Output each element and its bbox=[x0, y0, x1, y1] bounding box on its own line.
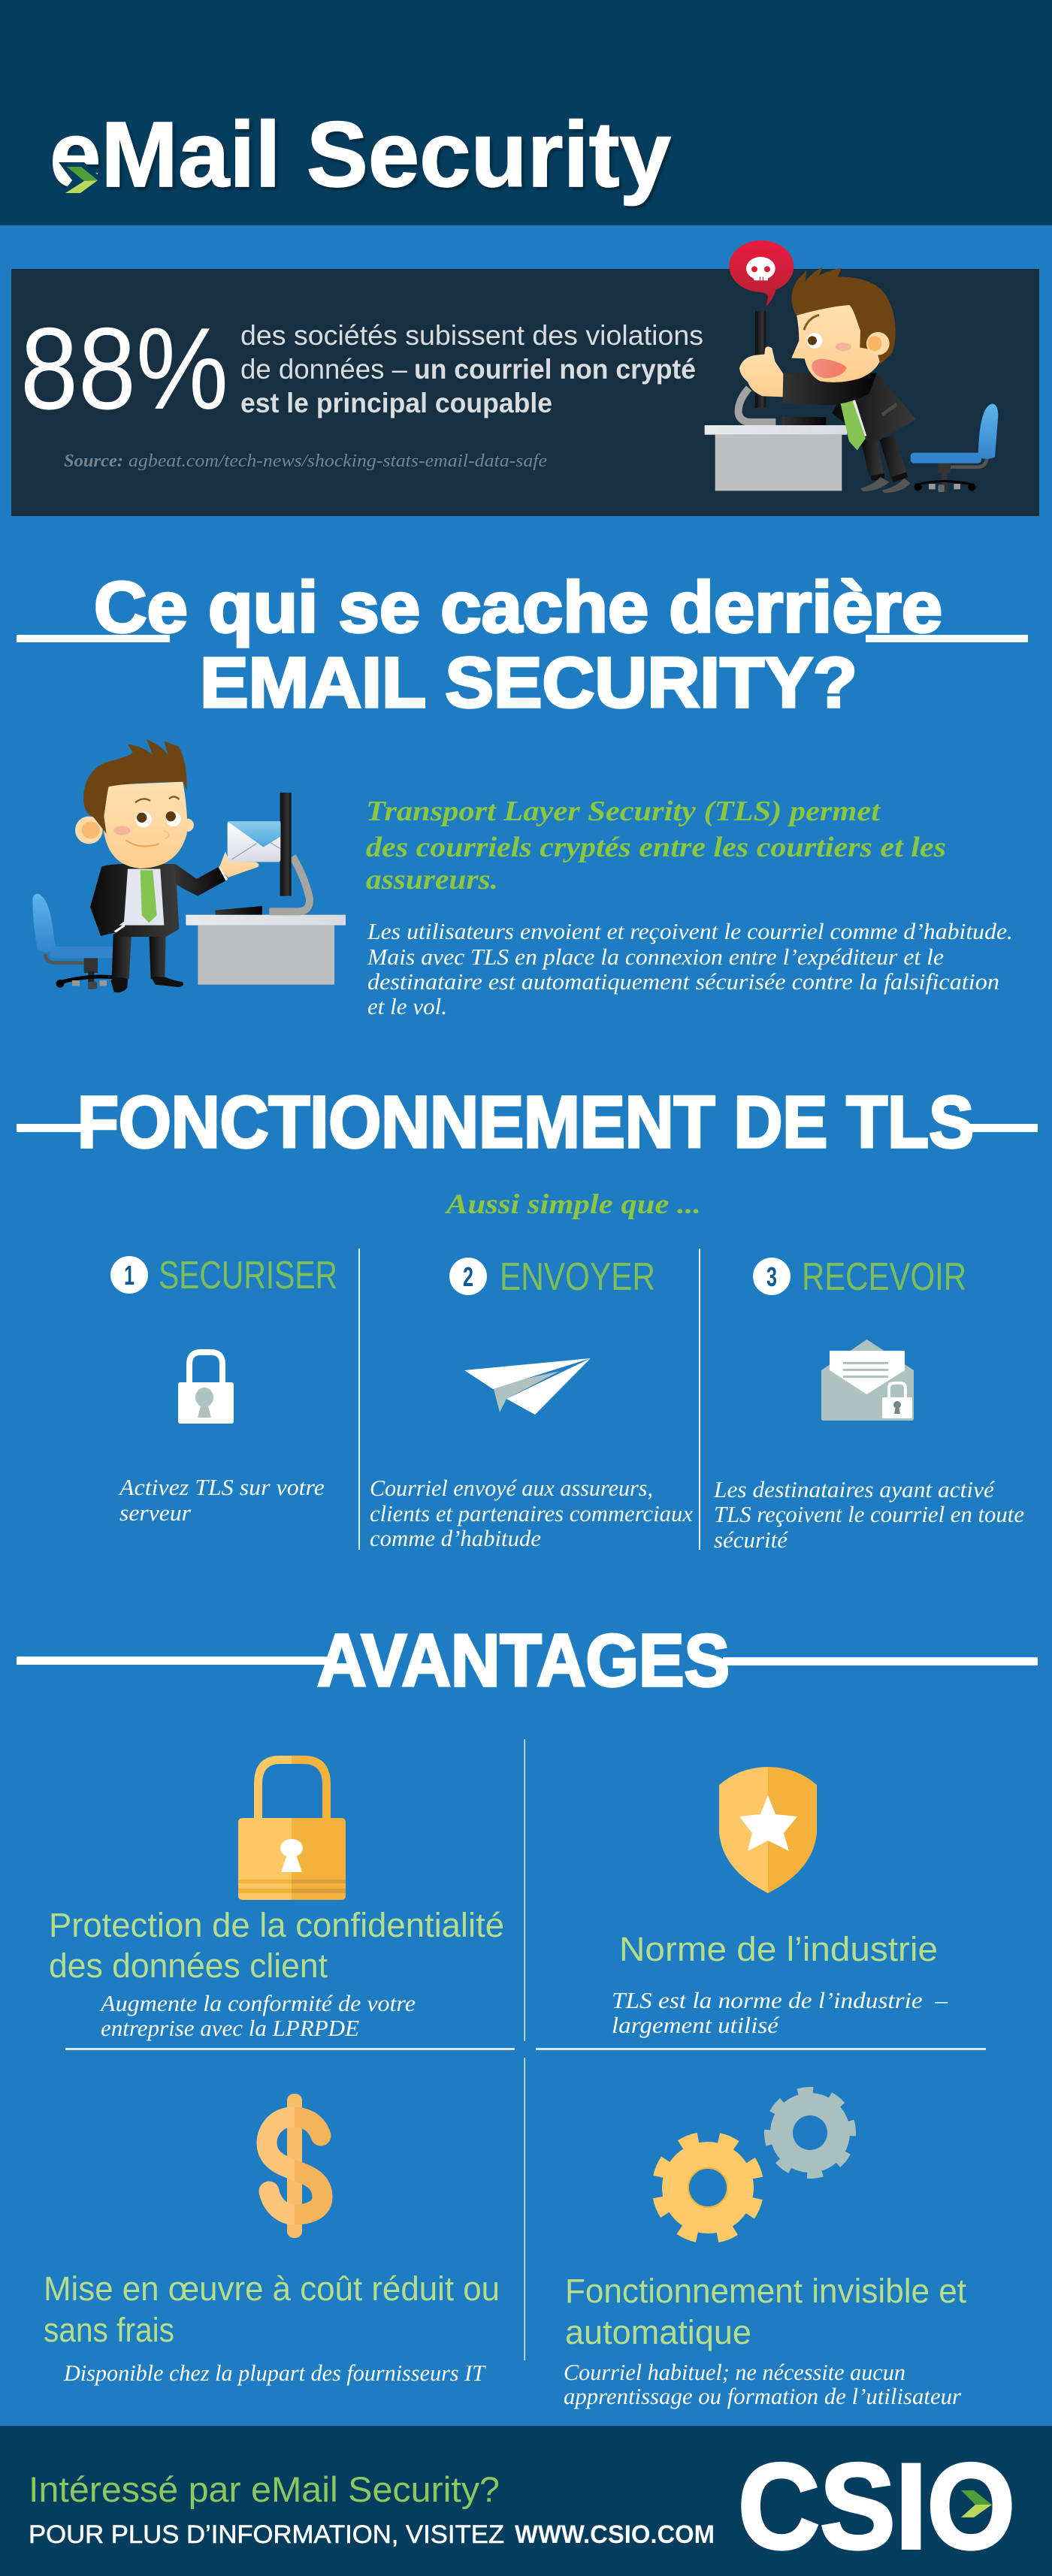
monitor bbox=[739, 311, 826, 425]
statistic text: est le principal coupable bbox=[240, 388, 552, 418]
CSIO logo: CSIO bbox=[738, 2439, 1015, 2574]
step description bbox=[713, 1476, 1024, 1553]
advantage title: Norme de l’industrie bbox=[619, 1930, 938, 1968]
advantage description: Disponible chez la plupart des fournisseurs IT bbox=[63, 2360, 487, 2386]
step 3: receive bbox=[713, 1255, 1024, 1553]
description: destinataire est automatiquement sécurisée contre la falsification bbox=[367, 968, 999, 995]
heading: advantages bbox=[17, 1619, 1038, 1702]
big number: 88% bbox=[20, 304, 228, 433]
step number bbox=[753, 1258, 791, 1295]
icon: title chevron bbox=[59, 162, 104, 198]
green lead: assureurs. bbox=[366, 864, 498, 895]
advantage title: Mise en œuvre à coût réduit ou bbox=[44, 2269, 500, 2308]
step title: ENVOYER bbox=[500, 1255, 655, 1299]
step number: 3 bbox=[766, 1261, 777, 1292]
step description: Courriel envoyé aux assureurs, bbox=[370, 1475, 653, 1501]
footer bbox=[0, 2426, 1052, 2576]
intro text bbox=[366, 796, 1013, 1019]
footer link text bbox=[29, 2520, 715, 2549]
advantage title bbox=[49, 1906, 504, 1985]
icon: paper plane bbox=[464, 1358, 591, 1415]
statistic text: des sociétés subissent des violations bbox=[240, 320, 703, 351]
advantage title bbox=[44, 2269, 500, 2349]
envelope bbox=[228, 821, 280, 862]
step description: TLS reçoivent le courriel en toute bbox=[714, 1501, 1024, 1527]
advantage description: entreprise avec la LPRPDE bbox=[101, 2015, 359, 2041]
description: Mais avec TLS en place la connexion entre l’expéditeur et le bbox=[367, 944, 944, 970]
chair bbox=[32, 894, 116, 989]
panel: 88% statistic bbox=[11, 269, 1039, 516]
advantage description: Augmente la conformité de votre bbox=[99, 1990, 416, 2016]
advantage title: Fonctionnement invisible et bbox=[565, 2272, 966, 2310]
advantage description: apprentissage ou formation de l’utilisateur bbox=[564, 2383, 962, 2409]
monitor bbox=[216, 793, 310, 915]
icon: gold padlock bbox=[238, 1756, 346, 1900]
description: Les utilisateurs envoient et reçoivent le courriel comme d’habitude. bbox=[367, 918, 1013, 944]
advantage description: largement utilisé bbox=[612, 2012, 779, 2038]
man head bbox=[791, 267, 896, 382]
footer call to action: Intéressé par eMail Security? bbox=[29, 2469, 500, 2509]
step title: SECURISER bbox=[159, 1254, 337, 1297]
step description: Les destinataires ayant activé bbox=[713, 1476, 995, 1502]
advantage description: TLS est la norme de l’industrie – bbox=[612, 1987, 948, 2013]
advantage description bbox=[612, 1987, 948, 2038]
heading: advantages: AVANTAGES bbox=[317, 1619, 730, 1702]
desk bbox=[705, 425, 847, 491]
advantage: low cost bbox=[44, 2094, 500, 2386]
step number bbox=[449, 1258, 487, 1295]
advantage title: sans frais bbox=[44, 2311, 174, 2349]
source: agbeat.com/tech-news/shocking-stats-email-data-safe bbox=[128, 451, 547, 471]
step number bbox=[110, 1256, 148, 1294]
step number: 1 bbox=[124, 1260, 135, 1291]
icon: padlock bbox=[178, 1352, 234, 1424]
title: eMail Security bbox=[50, 104, 671, 207]
green lead: Transport Layer Security (TLS) permet bbox=[366, 796, 881, 827]
step description bbox=[370, 1475, 693, 1551]
advantage: data protection bbox=[49, 1756, 504, 2041]
advantage description: Courriel habituel; ne nécessite aucun bbox=[564, 2359, 905, 2385]
advantage title bbox=[565, 2272, 966, 2351]
description: et le vol. bbox=[367, 993, 447, 1019]
description bbox=[367, 918, 1013, 1019]
man hand bbox=[739, 346, 783, 397]
step 2: send bbox=[370, 1255, 693, 1551]
illustration: man holding envelope at computer bbox=[32, 739, 346, 992]
step description: clients et partenaires commerciaux bbox=[370, 1500, 693, 1527]
source: Source: bbox=[64, 451, 123, 471]
step description: serveur bbox=[119, 1499, 192, 1526]
illustration: alarmed man at computer with skull alert bbox=[705, 240, 998, 493]
man hand bbox=[219, 851, 258, 877]
heading: what lies behind bbox=[17, 567, 1028, 723]
advantage: industry standard bbox=[612, 1767, 948, 2038]
chair bbox=[911, 403, 998, 492]
green lead: des courriels cryptés entre les courtiers et les bbox=[366, 832, 946, 863]
step number: 2 bbox=[463, 1261, 473, 1292]
advantage title: des données client bbox=[49, 1946, 328, 1985]
footer link text: WWW.CSIO.COM bbox=[515, 2520, 715, 2549]
icon: secure envelope bbox=[821, 1339, 914, 1421]
step 1: secure bbox=[110, 1254, 337, 1526]
advantage title: automatique bbox=[565, 2313, 751, 2351]
advantage description bbox=[99, 1990, 416, 2041]
step description: comme d’habitude bbox=[370, 1525, 541, 1551]
statistic text: un courriel non crypté bbox=[414, 354, 696, 385]
advantage description bbox=[564, 2359, 962, 2409]
subheading: Aussi simple que ... bbox=[445, 1189, 701, 1220]
man head bbox=[75, 739, 194, 868]
icon: red skull speech bubble bbox=[729, 240, 794, 307]
step description bbox=[118, 1474, 325, 1526]
desk bbox=[186, 915, 346, 985]
advantage: invisible operation bbox=[564, 2077, 966, 2409]
man body bbox=[90, 864, 228, 992]
green lead bbox=[366, 796, 946, 895]
footer link text: POUR PLUS D’INFORMATION, VISITEZ bbox=[29, 2520, 504, 2549]
step title: RECEVOIR bbox=[802, 1255, 966, 1299]
icon: shield with star bbox=[719, 1767, 817, 1893]
heading: how TLS works: FONCTIONNEMENT DE TLS bbox=[77, 1081, 974, 1163]
advantage title: Protection de la confidentialité bbox=[49, 1906, 504, 1944]
heading: what lies behind: Ce qui se cache derrière bbox=[94, 567, 942, 648]
heading: what lies behind: EMAIL SECURITY? bbox=[200, 643, 857, 723]
statistic text bbox=[240, 320, 703, 418]
step description: Activez TLS sur votre bbox=[118, 1474, 325, 1500]
header banner bbox=[0, 0, 1052, 225]
man body bbox=[783, 373, 916, 493]
icon: dollar sign bbox=[267, 2094, 322, 2238]
statistic text: de données – bbox=[240, 354, 407, 385]
icon: gears bbox=[648, 2077, 866, 2248]
step description: sécurité bbox=[714, 1527, 788, 1553]
